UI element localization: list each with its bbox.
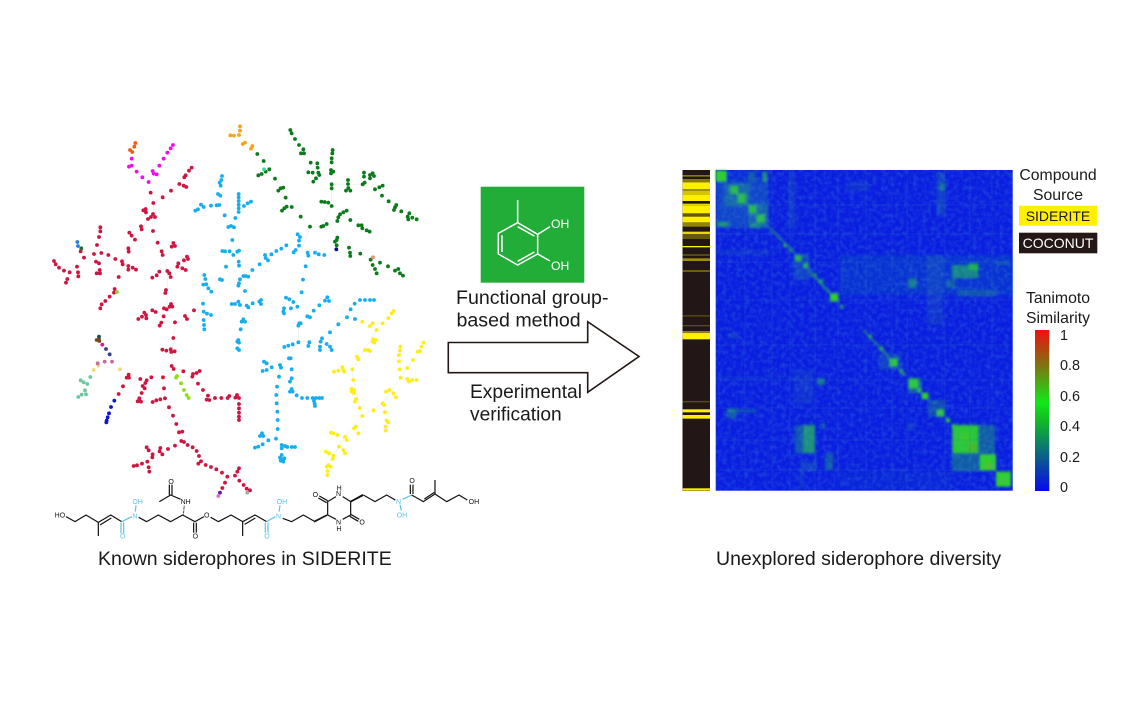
magenta cluster [129,145,173,182]
accent nodes [77,169,373,292]
arrow [448,322,639,392]
chemical structure: siderophore molecule: N [336,491,341,498]
upper-right cluster regions [840,172,1013,325]
legend: Tanimoto similarity colour bar: 0.6 [1060,389,1080,405]
legend: compound source [1019,167,1097,253]
lower-right diagonal clusters [840,330,1011,488]
panel: known siderophores network [54,126,424,496]
legend: Tanimoto similarity colour bar: 0.4 [1060,419,1080,435]
chemical structure: siderophore molecule: O [204,513,210,520]
chemical structure: siderophore molecule: HO [55,513,66,520]
legend: Tanimoto similarity colour bar: 0 [1060,480,1068,496]
compound source strip [682,170,710,491]
text: functional group-based method: Functional group- [456,287,608,309]
legend: Tanimoto similarity colour bar: 0.2 [1060,450,1080,466]
heatmap: Tanimoto similarity matrix [716,170,1013,491]
chemical structure: siderophore molecule: N [396,499,401,506]
legend: compound source: Compound [1019,167,1097,184]
chemical structure: siderophore molecule: N [336,520,341,527]
chemical structure: siderophore molecule: O [359,519,365,526]
upper-left cluster regions [716,170,843,308]
chemical structure: siderophore molecule: N [276,513,281,520]
text: functional group-based method: based method [456,310,581,332]
chemical structure: siderophore molecule: N [132,513,137,520]
small branch clusters [78,337,247,496]
chemical structure: siderophore molecule: H [337,486,342,493]
chemical structure: siderophore molecule [55,478,479,541]
text: experimental verification: Experimental [470,382,582,403]
chemical structure: siderophore molecule: O [168,479,174,486]
green cluster [257,130,417,276]
network edges [114,154,413,465]
chemical structure: siderophore molecule: O [409,478,415,485]
legend: Tanimoto similarity colour bar [1026,290,1090,496]
icon: functional group on green square: OH [551,259,569,273]
chemical structure: siderophore molecule: O [264,534,270,541]
cyan cluster [195,176,374,462]
legend: Tanimoto similarity colour bar: 1 [1060,328,1068,344]
legend: Tanimoto similarity colour bar: Similarity [1026,310,1090,327]
text: experimental verification: verification [470,405,562,426]
icon: functional group on green square [481,187,584,283]
chemical structure: siderophore molecule: OH [277,499,287,506]
red cluster [54,168,250,490]
heatmap noise texture [716,170,1013,491]
chemical structure: siderophore molecule: OH [397,513,407,520]
legend: compound source: SIDERITE [1026,208,1090,224]
icon: functional group on green square: OH [551,217,569,231]
chemical structure: siderophore molecule: OH [132,499,143,506]
chemical structure: siderophore molecule: O [120,534,126,541]
legend: Tanimoto similarity colour bar: 0.8 [1060,358,1080,374]
chemical structure: siderophore molecule: H [336,526,341,533]
caption: known siderophores: Known siderophores in SIDERITE [98,548,392,570]
lower-left cluster regions [717,333,833,488]
legend: Tanimoto similarity colour bar: Tanimoto [1026,290,1090,307]
legend: compound source: Source [1033,187,1083,204]
chemical structure: siderophore molecule: O [193,534,199,541]
chemical structure: siderophore molecule: NH [181,499,191,506]
chemical structure: siderophore molecule: OH [469,499,479,506]
orange clusters [130,126,252,152]
heatmap texture lines [716,170,1012,490]
legend: compound source: COCONUT [1023,235,1094,251]
caption: unexplored diversity: Unexplored siderophore diversity [716,548,1001,570]
yellow cluster [326,311,424,475]
chemical structure: siderophore molecule: O [313,492,319,499]
